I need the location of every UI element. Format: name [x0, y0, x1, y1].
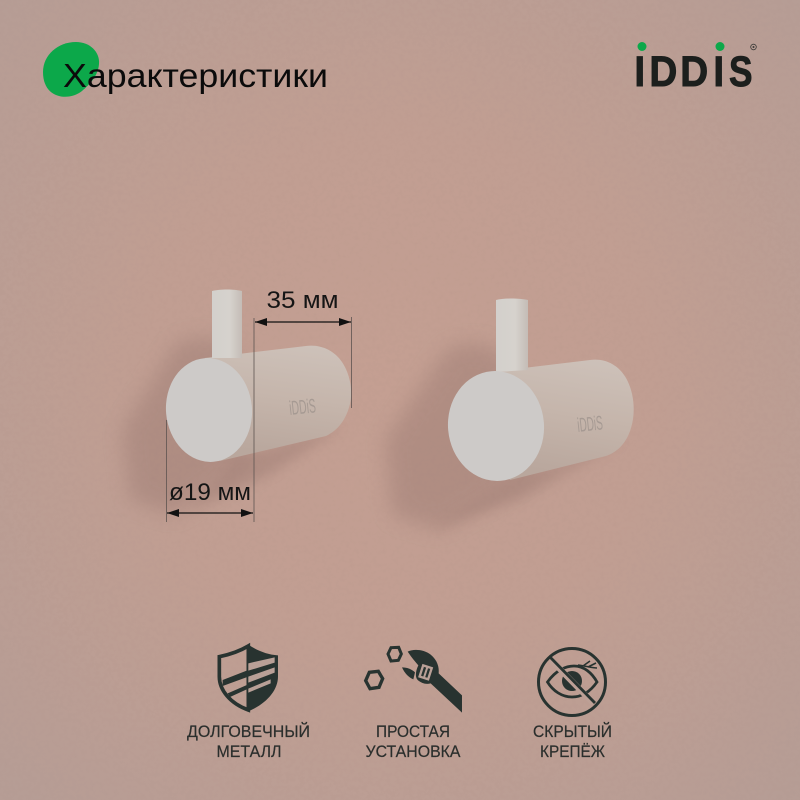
left hook cylinder body — [203, 346, 351, 461]
right hook cylinder body — [488, 360, 634, 480]
dimension: width 35 mm: 35 мм — [266, 287, 338, 314]
green blob behind heading — [43, 42, 99, 97]
logo: IDDIS: S — [729, 48, 753, 96]
left hook — [122, 290, 351, 515]
right hook — [385, 298, 634, 530]
right hook peg — [496, 298, 528, 372]
right hook wall shadow — [385, 343, 540, 530]
left hook peg — [212, 290, 242, 358]
dimension: diameter 19 mm: ø19 мм — [169, 479, 251, 506]
label: hidden fastening — [533, 722, 612, 761]
label: easy installation — [366, 723, 460, 761]
dimension: diameter 19 mm — [166, 420, 253, 522]
title: Характеристики — [63, 57, 328, 94]
right hook engraved logo: iDDiS — [576, 413, 604, 437]
left hook wall shadow — [122, 338, 250, 515]
label: durable metal: МЕТАЛЛ — [216, 743, 282, 761]
left hook engraved logo: iDDiS — [288, 396, 317, 420]
left hook end face — [162, 354, 256, 466]
icon: crossed-out eye — [538, 648, 606, 716]
icon: wrench and nuts — [366, 647, 462, 713]
right hook end face — [443, 367, 549, 485]
logo: IDDIS — [634, 42, 756, 96]
label: durable metal — [187, 722, 310, 761]
logo: IDDIS: IDDI — [634, 47, 724, 95]
label: hidden fastening: СКРЫТЫЙ — [533, 722, 612, 741]
label: hidden fastening: КРЕПЁЖ — [540, 743, 606, 761]
label: durable metal: ДОЛГОВЕЧНЫЙ — [187, 722, 310, 741]
label: easy installation: УСТАНОВКА — [366, 743, 460, 761]
label: easy installation: ПРОСТАЯ — [376, 723, 450, 741]
icon: shield — [219, 645, 278, 711]
